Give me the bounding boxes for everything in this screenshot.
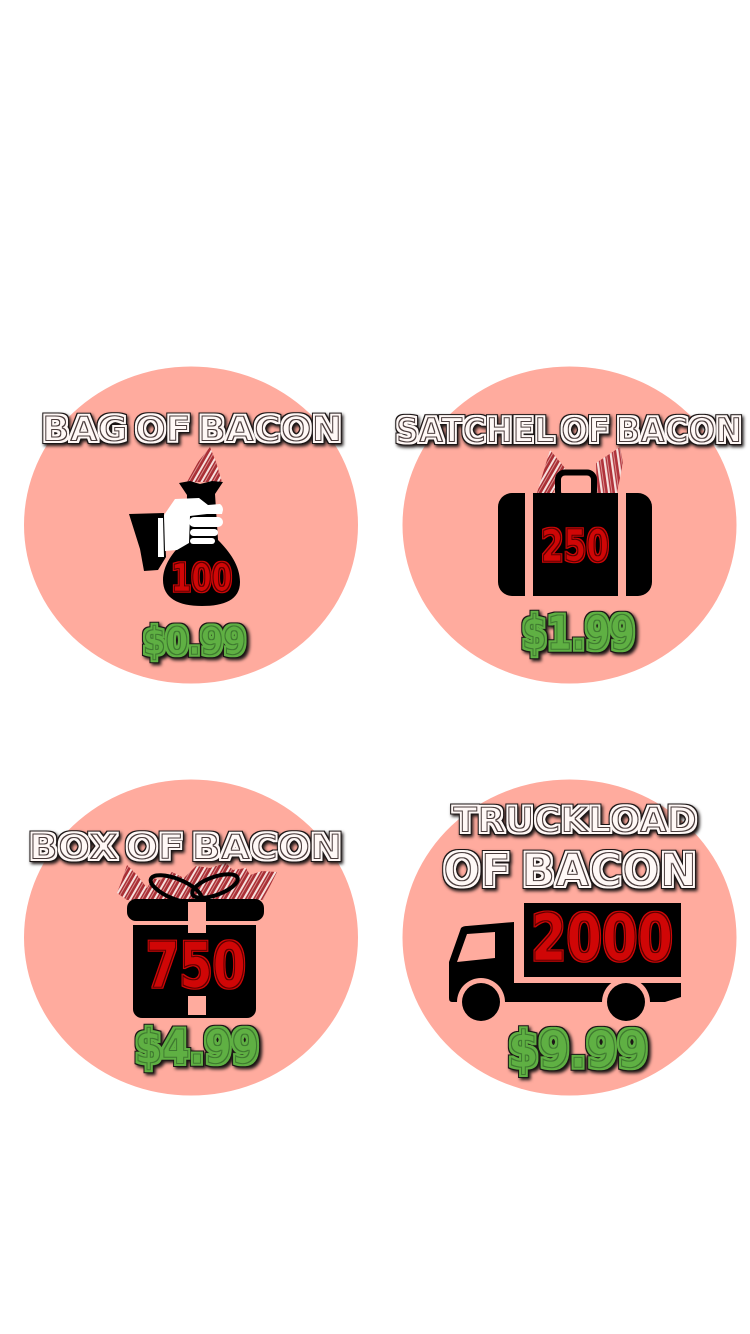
circle background: bag [24,366,358,684]
count: 750: 750 [146,929,246,1002]
icon: bacon strips in satchel [537,447,623,493]
price: $1.99: $1.99 [522,606,635,660]
count: 100: 100 [171,556,232,600]
price: $9.99: $9.99 [508,1021,648,1079]
circle background: truckload [402,780,736,1096]
price: $4.99: $4.99 [135,1020,259,1074]
panel: truckload of bacon [402,780,736,1096]
icon: truck [449,903,681,1021]
circle background: satchel [402,366,736,684]
panel: bag of bacon [24,366,358,684]
title: truckload: TRUCKLOAD [453,801,697,841]
panel: satchel of bacon [396,366,742,684]
circle background: box [24,780,358,1096]
icon: hand [158,498,223,557]
icon: suitcase [498,472,652,596]
title: of bacon: OF BACON [443,844,697,897]
panel: box of bacon [24,780,358,1096]
title: box of bacon: BOX OF BACON [29,828,342,868]
title: bag of bacon: BAG OF BACON [42,410,342,450]
price: $0.99: $0.99 [143,620,246,663]
icon: gift box [127,869,264,1018]
icon: bacon strips in bag [187,447,222,482]
icon: money bag [163,481,240,606]
count: 2000: 2000 [531,902,673,976]
count: 250: 250 [541,521,609,572]
icon: bacon strips in box [117,863,277,900]
icon: sleeve [129,513,166,571]
